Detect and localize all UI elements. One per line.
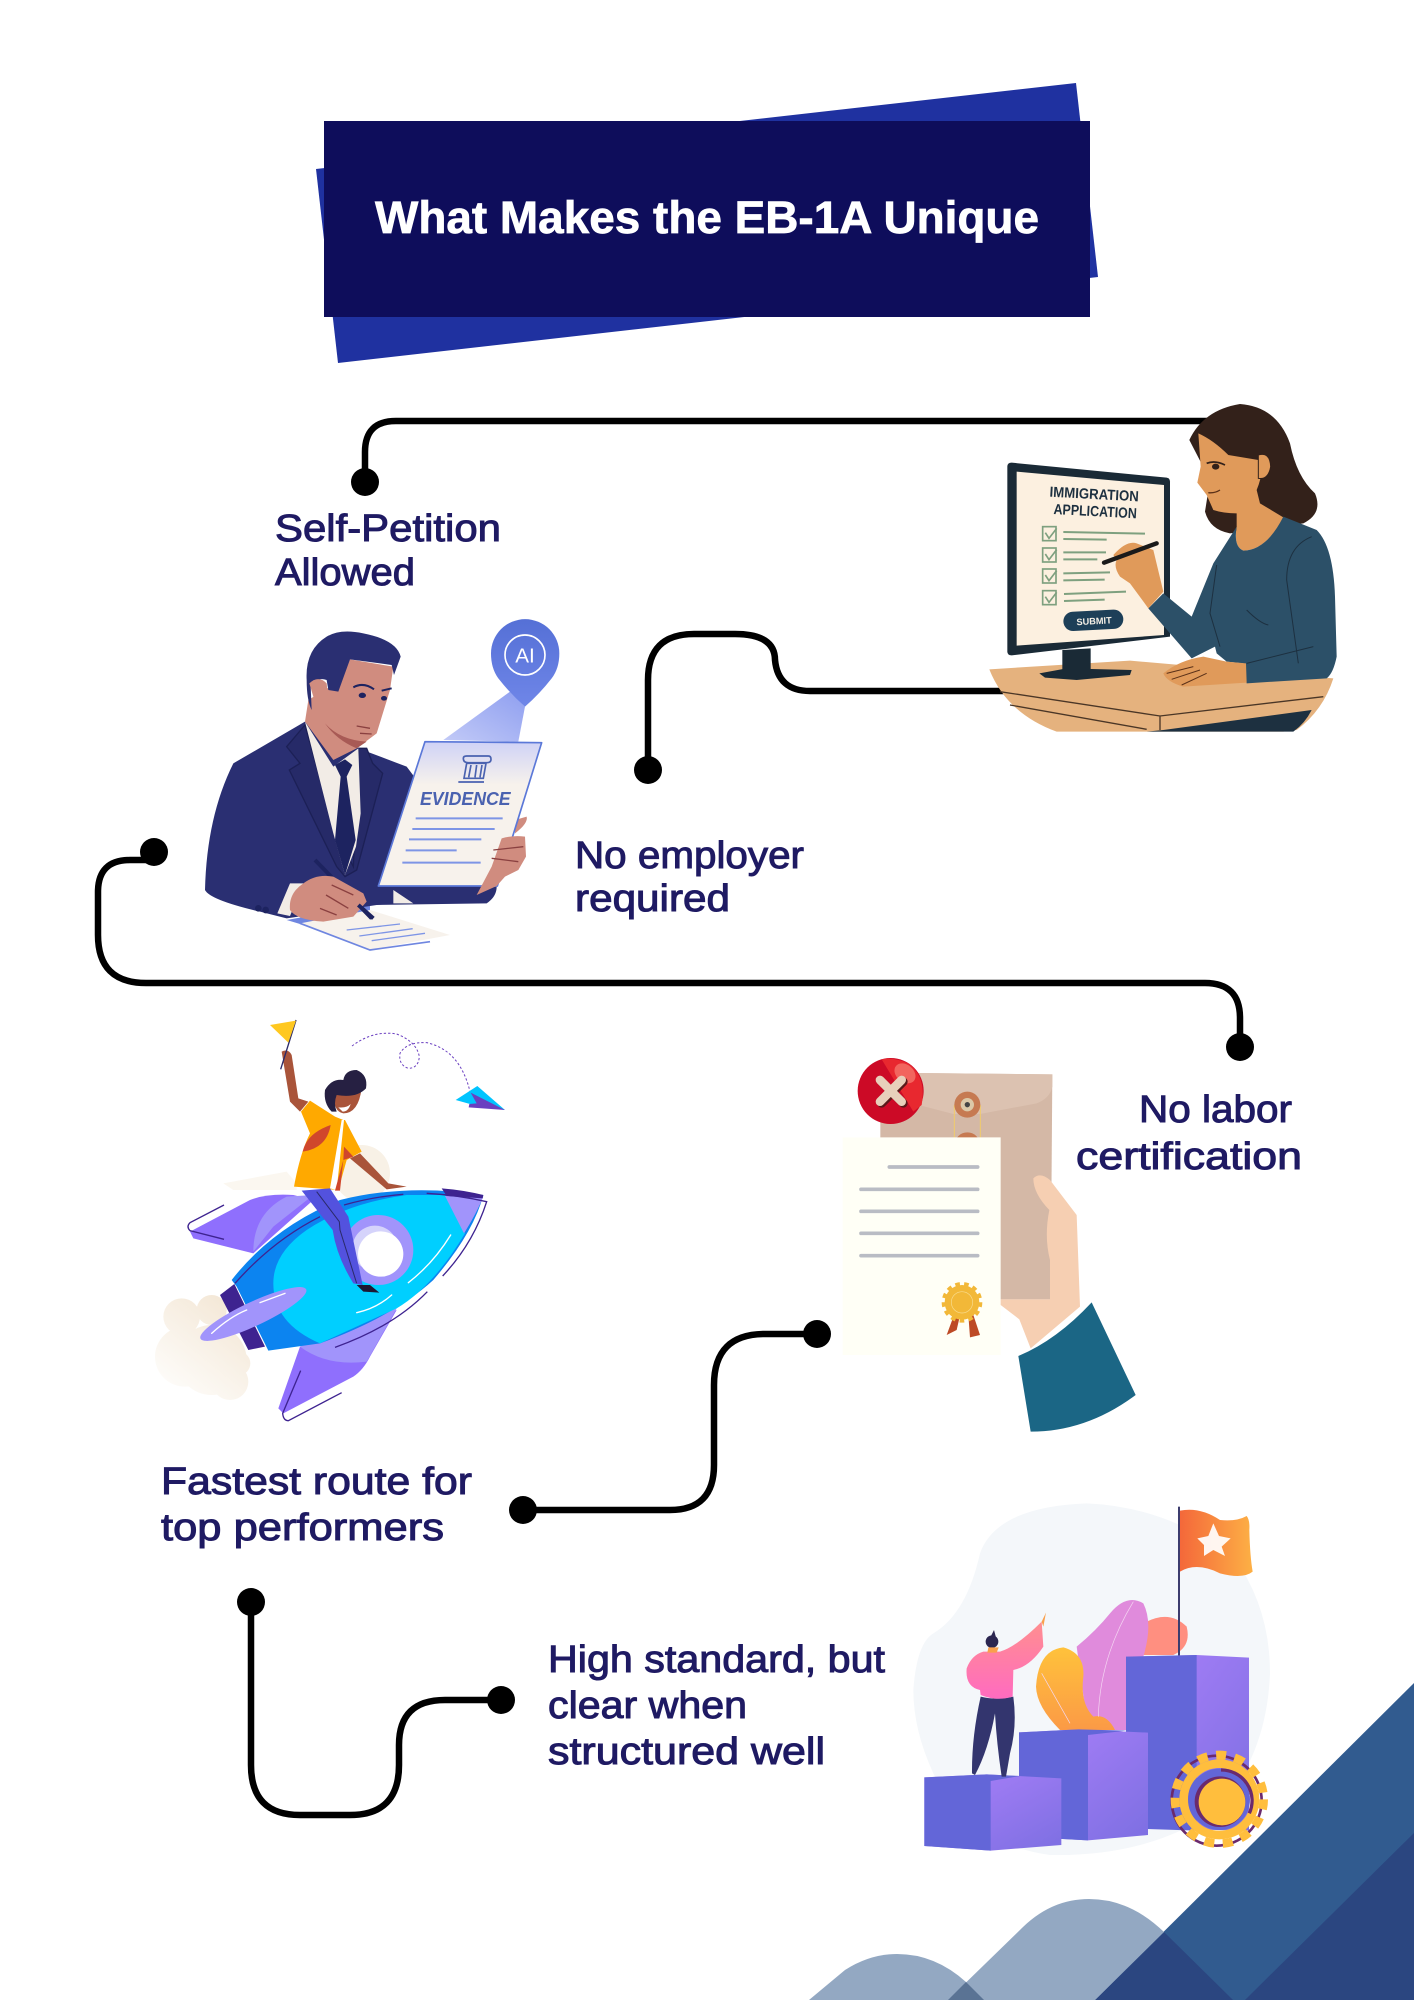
label: no employer required: required [575, 878, 730, 920]
illustration: man in suit holding evidence document: AI [515, 645, 535, 668]
label: fastest route: Fastest route for [161, 1461, 472, 1503]
connector: fastest route to high standard [237, 1588, 515, 1815]
connector: application to no employer [634, 634, 1010, 784]
connector: no labor certification to evidence [98, 838, 1254, 1061]
label: no employer required: No employer [575, 835, 804, 877]
illustration: person on rising steps with flag and gear [913, 1503, 1270, 1855]
connector: fastest route to certificate [509, 1320, 831, 1524]
label: no labor certification: certification [1076, 1136, 1302, 1178]
illustration: woman at monitor filling immigration application [989, 404, 1337, 732]
title banner [316, 83, 1098, 363]
label: self-petition allowed: Allowed [275, 552, 415, 594]
illustration: woman at monitor filling immigration application: APPLICATION [1053, 502, 1137, 522]
label: no employer required [575, 835, 804, 920]
label: high standard [548, 1639, 885, 1773]
illustration: woman at monitor filling immigration application: SUBMIT [1076, 615, 1112, 627]
decorative corner shapes [809, 1683, 1414, 2000]
label: self-petition allowed [275, 508, 501, 594]
illustration: man in suit holding evidence document [205, 619, 559, 950]
illustration: man in suit holding evidence document: EVIDENCE [420, 788, 511, 809]
connector: application to self-petition [351, 421, 1215, 496]
illustration: person riding rocket [155, 1020, 505, 1421]
label: high standard: clear when [548, 1685, 747, 1727]
label: fastest route [161, 1461, 472, 1549]
label: no labor certification [1076, 1089, 1302, 1178]
label: fastest route: top performers [161, 1507, 444, 1549]
illustration: woman at monitor filling immigration application: IMMIGRATION [1049, 485, 1139, 505]
illustration: certificate and envelope held in hand [843, 1058, 1136, 1432]
label: high standard: High standard, but [548, 1639, 885, 1681]
label: self-petition allowed: Self-Petition [275, 508, 501, 550]
title text: What Makes the EB-1A Unique [375, 192, 1039, 243]
label: no labor certification: No labor [1139, 1089, 1292, 1131]
label: high standard: structured well [548, 1731, 825, 1773]
